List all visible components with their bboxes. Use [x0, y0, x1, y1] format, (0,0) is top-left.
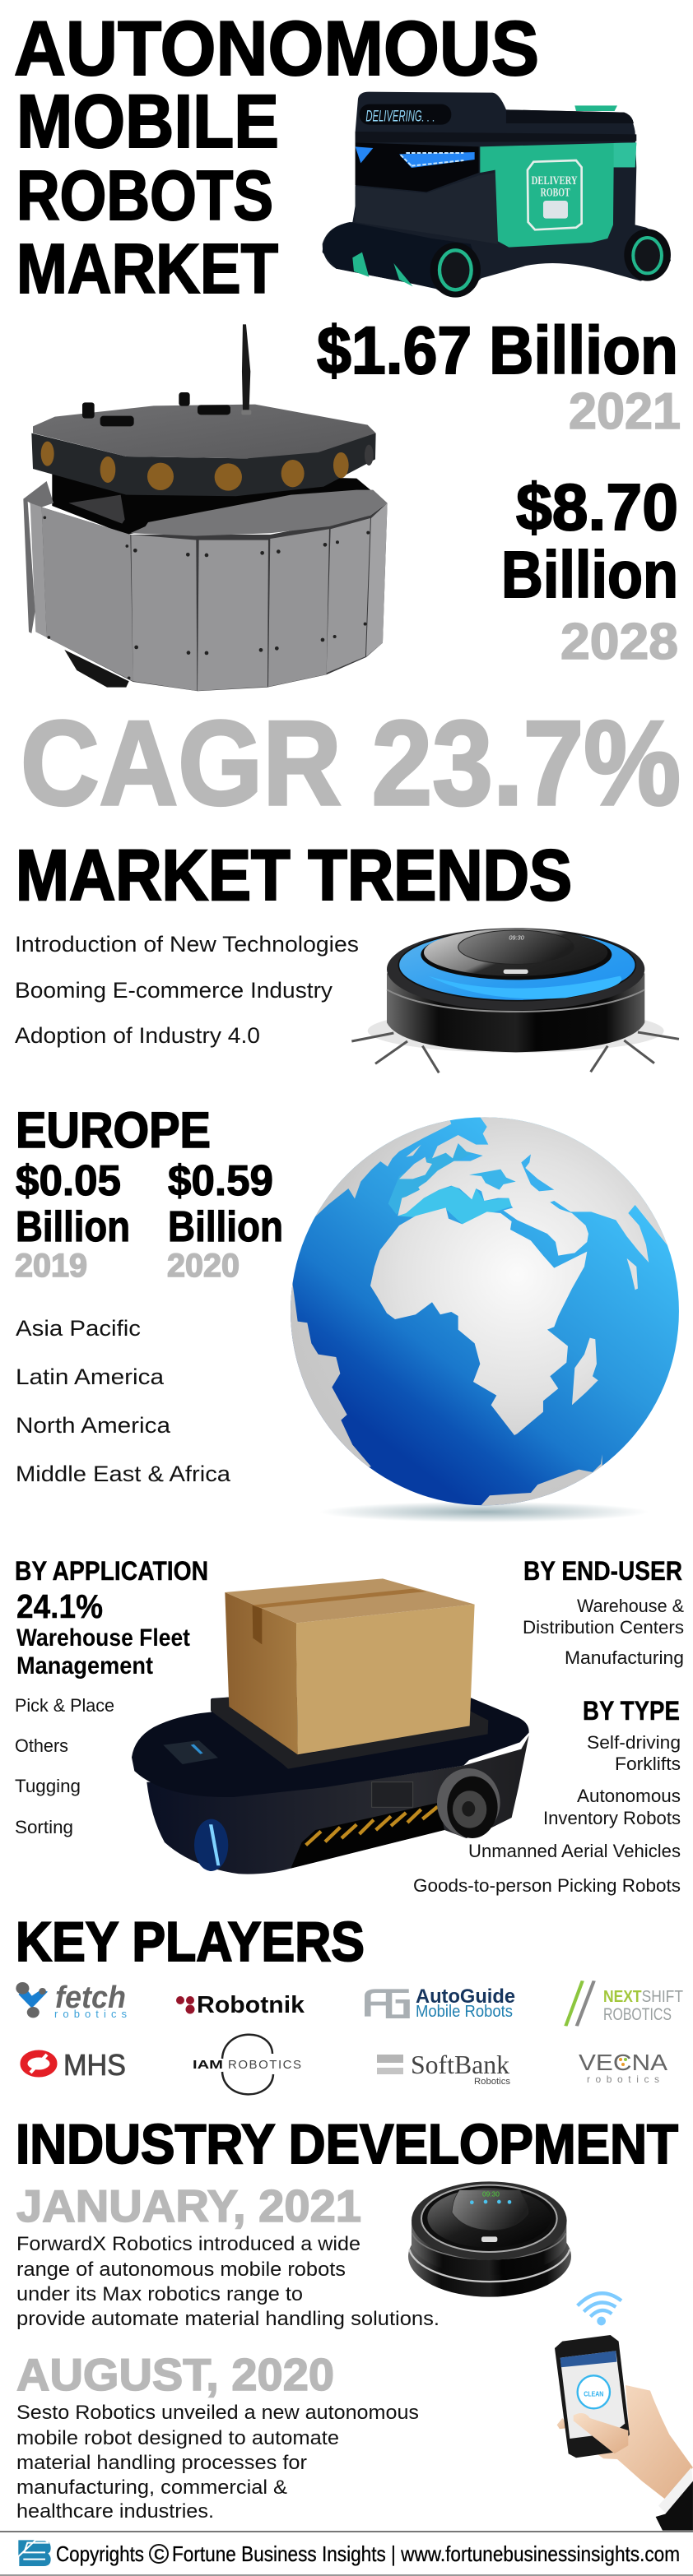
list: regions: Latin America: [16, 1364, 165, 1389]
title: AUTONOMOUS: [14, 5, 539, 91]
development: August 2020: AUGUST, 2020: [16, 2349, 334, 2400]
market size 2028: [501, 470, 678, 670]
illustration: hand holding phone with wifi signal: [555, 2293, 693, 2531]
logo: Vecna Robotics: [579, 2050, 667, 2085]
logo: fetch robotics: fetch: [55, 1981, 126, 2015]
logo: SoftBank Robotics: Robotics: [474, 2077, 511, 2087]
regional lead: Europe: [15, 1102, 283, 1284]
illustration: green delivery robot: [323, 92, 671, 298]
heading: key players: KEY PLAYERS: [16, 1911, 365, 1973]
segment: by application: Management: [16, 1652, 153, 1679]
logo: MHS: [24, 2048, 126, 2082]
regional lead: Europe: 2019: [15, 1248, 87, 1284]
market size 2021: 2021: [569, 383, 681, 440]
logo: Robotnik: Robotnik: [197, 1992, 305, 2018]
illustration: green delivery robot: DELIVERING: [365, 108, 422, 125]
list: market trends: Introduction of New Technologies: [15, 932, 359, 957]
development: August 2020: Sesto Robotics unveiled a new autonomous: [16, 2402, 419, 2424]
title: MARKET: [16, 230, 278, 308]
segment: by application: 24.1%: [16, 1587, 103, 1625]
illustration: black robot vacuum: [408, 2181, 571, 2297]
illustration: blue robot vacuum: [351, 928, 679, 1073]
development: January 2021: provide automate material handling solutions.: [16, 2308, 440, 2330]
segment: by application: Sorting: [15, 1817, 73, 1837]
logo: fetch robotics: robotics: [54, 2008, 127, 2020]
illustration: green delivery robot: ROBOT: [541, 187, 570, 200]
segment: by application: Others: [15, 1735, 68, 1756]
segment: by type: Self-driving: [587, 1732, 681, 1753]
market size 2021: [317, 313, 681, 440]
list: market trends: Booming E-commerce Industry: [15, 978, 333, 1003]
segment: by application: Tugging: [15, 1776, 81, 1796]
title: ROBOTS: [16, 157, 273, 235]
logo: Vecna Robotics: robotics: [587, 2073, 659, 2085]
development: August 2020: [16, 2349, 419, 2523]
development: January 2021: JANUARY, 2021: [16, 2180, 361, 2231]
segment: by type: Goods-to-person Picking Robots: [413, 1875, 681, 1896]
segment: by application: Pick & Place: [15, 1695, 114, 1716]
illustration: globe: [284, 1116, 685, 1522]
footer: C: [154, 2546, 165, 2563]
title: MOBILE: [16, 80, 279, 164]
development: January 2021: ForwardX Robotics introduced a wide: [16, 2233, 360, 2255]
segment: by end-user: Warehouse &: [577, 1596, 684, 1616]
development: August 2020: healthcare industries.: [16, 2500, 214, 2523]
market size 2028: $8.70: [516, 470, 678, 544]
regional lead: Europe: $0.05: [16, 1157, 121, 1205]
list: market trends: Adoption of Industry 4.0: [15, 1023, 260, 1048]
logo: fetch robotics: [16, 1981, 127, 2020]
illustration: hand holding phone with wifi signal: CLEAN: [584, 2389, 603, 2398]
segment: by end-user: [523, 1556, 684, 1668]
development: January 2021: [16, 2180, 440, 2330]
logo: NextShift Robotics: ROBOTICS: [603, 2005, 672, 2024]
illustration: black robot vacuum: 09:30: [482, 2190, 500, 2198]
regional lead: Europe: 2020: [167, 1248, 240, 1284]
logo: IAM Robotics: IAM: [193, 2058, 223, 2072]
development: January 2021: under its Max robotics range to: [16, 2283, 303, 2305]
heading: market trends: MARKET TRENDS: [16, 836, 572, 915]
list: regions: Asia Pacific: [16, 1316, 141, 1341]
segment: by end-user: Distribution Centers: [523, 1617, 684, 1638]
development: August 2020: manufacturing, commercial &: [16, 2476, 287, 2499]
illustration: grey round robot: [23, 324, 388, 691]
list: market trends: [15, 932, 359, 1048]
segment: by end-user: Manufacturing: [565, 1647, 684, 1668]
regional lead: Europe: $0.59: [168, 1157, 273, 1205]
logo: NextShift Robotics: NEXTSHIFT: [603, 1988, 683, 2006]
logo: NextShift Robotics: [565, 1981, 683, 2026]
footer: [0, 2531, 693, 2576]
logo: Vecna Robotics: VECNA: [579, 2050, 667, 2075]
segment: by type: BY TYPE: [583, 1696, 680, 1726]
logo: SoftBank Robotics: [377, 2050, 511, 2087]
logo: IAM Robotics: ROBOTICS: [228, 2058, 301, 2072]
logo: SoftBank Robotics: SoftBank: [411, 2050, 509, 2079]
market size 2028: 2028: [560, 614, 678, 670]
regional lead: Europe: Billion: [168, 1203, 283, 1251]
footer: Copyrights: [56, 2541, 144, 2566]
development: August 2020: material handling processes for: [16, 2452, 307, 2474]
segment: by type: Inventory Robots: [543, 1808, 681, 1828]
development: January 2021: range of autonomous mobile robots: [16, 2259, 346, 2281]
development: August 2020: mobile robot designed to automate: [16, 2427, 339, 2449]
title: [14, 5, 539, 308]
regional lead: Europe: Billion: [16, 1203, 130, 1251]
segment: by type: Unmanned Aerial Vehicles: [468, 1841, 681, 1861]
logo: AutoGuide Mobile Robots: AutoGuide: [416, 1985, 515, 2008]
logo: IAM Robotics: [193, 2035, 301, 2094]
segment: by type: Autonomous: [577, 1786, 681, 1806]
segment: by type: [413, 1696, 681, 1896]
list: regions: Middle East & Africa: [16, 1462, 231, 1486]
segment: by application: Warehouse Fleet: [16, 1624, 190, 1652]
list: regions: [16, 1316, 231, 1486]
logo: AutoGuide Mobile Robots: [368, 1985, 515, 2021]
logo: MHS: MHS: [63, 2048, 126, 2082]
segment: by application: [15, 1556, 208, 1837]
segment: by application: BY APPLICATION: [15, 1556, 208, 1586]
illustration: blue robot vacuum: 09:30: [509, 934, 525, 942]
regional lead: Europe: EUROPE: [16, 1102, 211, 1158]
list: regions: North America: [16, 1413, 171, 1438]
illustration: warehouse robot carrying box: [132, 1578, 529, 1874]
illustration: green delivery robot: DELIVERY: [532, 174, 578, 188]
illustration: green delivery robot: ...: [421, 111, 435, 123]
segment: by type: Forklifts: [615, 1754, 681, 1774]
logo: AutoGuide Mobile Robots: Mobile Robots: [416, 2003, 513, 2021]
